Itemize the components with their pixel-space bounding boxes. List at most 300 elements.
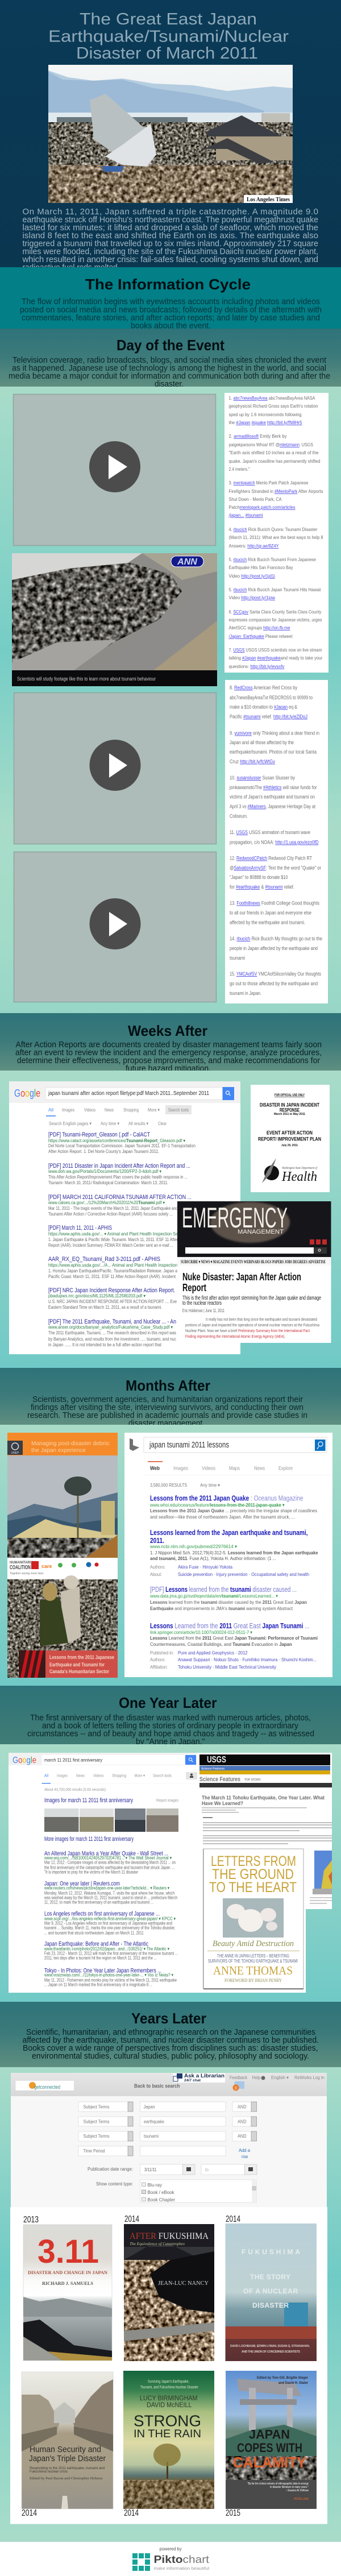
Bing results: www.data.jma.go.jp/svd/eqev/data/en/tsunami/LessonsLearned... ▾ [149, 1593, 278, 1599]
tabs: All [48, 1107, 53, 1113]
Los Angeles Times credit: Los Angeles Times [247, 197, 290, 203]
search rows: AND [238, 2119, 247, 2124]
text: one year later description [27, 1713, 314, 1747]
book: Human Security and Japan's Triple Disaster: Fukushima nuclear crisis [30, 2470, 68, 2474]
Health logo [262, 1158, 318, 1184]
Health logo: Health [281, 1169, 317, 1184]
footer: powered by Piktochart: powered by [159, 2546, 182, 2552]
logos strip: care [41, 1563, 52, 1569]
search results: www.theatlantic.com/photo/2012/02/japan...and.../100251/ ▾ The Atlantic ▾ [44, 1947, 169, 1951]
text: months after description [27, 1395, 307, 1428]
book: Strong in the Rain: DAVID McNEILL [147, 2402, 192, 2409]
search results: Eastern Standard Time on March 11, 2011, as a result of a tsunami. [48, 1305, 162, 1310]
date range and content type: Publication date range: [88, 2167, 133, 2172]
text: day of the event description: Television coverage, radio broadcasts, blogs, and social media sites chronicled the event [13, 355, 327, 365]
document cover: Washington State Department of Health: REPORT/ IMPROVEMENT PLAN [258, 1136, 321, 1143]
document cover: Washington State Department of Health: DISASTER IN JAPAN INCIDENT [260, 1102, 319, 1109]
text: weeks after description: determine their effectiveness, propose improvements, and make recommendations for [17, 1056, 320, 1065]
footer: powered by Piktochart [0, 2542, 341, 2576]
book year labels: 2013 [23, 2215, 39, 2225]
search results: Japan: One year later | Reuters.com [44, 1881, 120, 1888]
tabs: News [254, 1466, 265, 1471]
tabs: Shopping [123, 1107, 139, 1113]
book: After Fukushima: JEAN-LUC NANCY [158, 2280, 209, 2287]
Bing results: Countermeasures, Coastal Buildings, and Tsunami Evacuation in Japan [150, 1641, 292, 1647]
panel: tweets 1-7: /Japan_Earthquake Please retweet [228, 633, 293, 639]
Bing results: About: [150, 1571, 162, 1577]
Ask a Librarian chat badge: 24/7 chat [184, 2079, 201, 2083]
panel: tweets 1-7: 4. rbucich Rick Bucich Quora: Tsunami Disaster [228, 526, 318, 532]
panel: tweets 1-7: (March 11, 2011): What are the best ways to help 8 [228, 534, 323, 540]
Bing results: Lessons learned from the tsunami disaster caused by the 2011 Great East Japan [150, 1599, 307, 1605]
band: Day of the Event [0, 329, 341, 389]
heading: Months After: Months After [126, 1377, 210, 1394]
search results: Mar 11, 2011 - The tragic events of the March 11, 2011 Japan Earthquake and [48, 1206, 178, 1211]
search results: pbadupws.nrc.gov/docs/ML1125/ML112580203.pdf ▾ [48, 1293, 145, 1299]
intro paragraph: earthquake struck off Honshu's northeastern coast. The powerful megathrust quake [23, 215, 318, 225]
video placeholder 2 [14, 692, 216, 844]
panel: tweets 1-7: Video http://post.ly/1jd1i [228, 573, 275, 579]
title: The Great East Japan [80, 10, 257, 28]
book year labels [22, 2214, 240, 2518]
search rows: earthquake [144, 2119, 164, 2124]
book: Fukushima, The Story of a Nuclear Disaster: FUKUSHIMA [242, 2248, 300, 2256]
title [48, 10, 289, 63]
book: Fukushima, The Story of a Nuclear Disaster [225, 2224, 317, 2361]
Ask a Librarian chat badge: Ask a Librarian [184, 2073, 224, 2079]
text: day of the event description: as it happened. Japanese use of technology is among the highest in the world, and social [12, 363, 326, 373]
screenshot: Emergency Management article [177, 1201, 331, 1343]
search results: [PDF] The 2011 Earthquake, Tsunami, and Nuclear ... - An [48, 1318, 176, 1325]
screenshot: Google search for first anniversary [9, 1753, 198, 1993]
tabs: Videos [202, 1466, 215, 1471]
tabs: 3,580,000 RESULTS [150, 1483, 187, 1488]
panel: tweets 1-7: Patchmenlopark.patch.com/articles [228, 504, 296, 510]
top links [230, 2075, 325, 2080]
search rows: row [242, 2154, 248, 2159]
band: One Year Later [0, 1686, 341, 1747]
book: After Fukushima: The Equivalence of Catastrophes [130, 2241, 185, 2246]
article subhead and body: Finding representing the International Atomic Energy Agency (IAEA). [185, 1334, 285, 1339]
book: Fukushima, The Story of a Nuclear Disaster: AND THE UNION OF CONCERNED SCIENTISTS [242, 2350, 301, 2354]
cover photo: survivors [7, 1575, 118, 1678]
red title box: Earthquake and Tsunami for [49, 1662, 105, 1668]
Ask a Librarian chat badge [173, 2073, 225, 2083]
panel: tweets 1-7: 2.4 meters." [228, 466, 250, 472]
search results: AAR_RX_EQ_Tsunami_Rad 3-2011.pdf - APHIS [48, 1256, 160, 1263]
panel: tweets 1-7: 5. rbucich Rick Bucich Japan Tsunami Hits Hawaii [228, 587, 321, 592]
search results: [PDF] MARCH 2011 CALIFORNIA TSUNAMI AFTER ACTION ... [48, 1194, 192, 1201]
tabs [42, 1772, 197, 1792]
screenshot: USGS science features article: Science Features [201, 1767, 224, 1770]
book: Strong in the Rain: IN THE RAIN [134, 2428, 201, 2440]
article headline: Report [182, 1282, 206, 1293]
Bing results: www.ncbi.nlm.nih.gov/pubmed/22976614 ▾ [149, 1544, 238, 1549]
panel: tweets 1-7: 5. rbucich Rick Bucich Tsunami From Japanese [228, 557, 316, 562]
Bing results [149, 1494, 318, 1670]
caption: Scientists will study footage like this to learn more about tsunami behaviour [17, 676, 156, 682]
tabs: More ▾ [134, 1773, 145, 1778]
book: Letters from the Ground to the Heart: LETTERS FROM [211, 1853, 296, 1869]
text: one year later description: and a book of letters telling the stories of ordinary people in extraordinary [42, 1721, 298, 1731]
top links: Help [252, 2075, 260, 2080]
panel: tweets 8-15: Coliseum. [230, 813, 248, 819]
intro paragraph [22, 207, 318, 272]
report cover: Managing post-disaster debris [7, 1433, 118, 1678]
book: Fukushima, The Story of a Nuclear Disaster: DAVID LOCHBAUM, EDWIN LYMAN, SUSAN Q. STRANAHAN, [230, 2345, 310, 2348]
book year labels: 2015 [226, 2508, 240, 2518]
tabs [46, 1105, 192, 1126]
book: Japan Copes with Calamity: "By far the richest volume of ethnographic data to emerge [247, 2482, 309, 2486]
book: Japan Copes with Calamity: Edited by Tom Gill, Brigitte Steger [257, 2376, 308, 2380]
book: Human Security and Japan's Triple Disaster [22, 2372, 113, 2509]
video placeholder 1 [14, 395, 216, 546]
search results: [PDF] NRC Japan Incident Response After Action Report. [48, 1287, 175, 1294]
text: one year later description: by "Anne in Japan." [136, 1737, 205, 1747]
book: Strong in the Rain: Tsunami, and Fukushima Nuclear Disaster [140, 2386, 199, 2390]
tabs: News [105, 1107, 114, 1113]
intro paragraph: which resulted in another crisis: fail-safes failed, cooling systems shut down, and [22, 255, 318, 264]
search rows: Subject Terms [83, 2134, 109, 2139]
section: years later content [0, 2067, 341, 2542]
panel: tweets 1-7: questions: http://bit.ly/evsxfv [228, 663, 285, 669]
search results: 11, 2012, to mark the first anniversary of an earthquake and tsunami ... [44, 1900, 153, 1905]
panel: tweets 8-15: 11. USGS USGS animation of tsunami wave [230, 829, 310, 835]
search results: ... Japan on 11 March marked the first anniversary of a magnitude-9 ... [44, 1982, 152, 1988]
Bing results: Published in: [150, 1650, 174, 1656]
panel: tweets 1-7: the #Japan #quake http://bit.ly/fN8Hr5 [228, 420, 302, 425]
book: Strong in the Rain [123, 2371, 214, 2509]
search results: 1. Japan Earthquake & Pacific Wide. Tsunami. March 11, 2011. ESF 11 After [48, 1237, 178, 1242]
tabs: Search tools [153, 1773, 172, 1778]
panel: tweets 8-15: @SalvationArmySF: Text the the word "Quake" or [230, 865, 321, 871]
search rows: Japan [143, 2105, 155, 2109]
image thumbnails [44, 1808, 178, 1832]
date range and content type: Book / eBook [148, 2190, 174, 2195]
panel: tweets 8-15: Japan and all those affected by the [230, 740, 294, 745]
date range and content type: Show content type: [96, 2181, 133, 2187]
search results: [PDF] March 11, 2011 - APHIS [48, 1225, 112, 1231]
search results: 2011, two days after a tsunami hit the region on March 11, 2011 and the ... [44, 1956, 157, 1960]
panel: tweets 8-15: propagation, c/o NOAA: http://1.usa.gov/ezo0fD [230, 839, 319, 845]
panel: tweets 1-7: paigekparsons Whoa! RT @mletzmann: USGS [228, 442, 313, 447]
red title box: Lessons from the 2011 Japanese [49, 1654, 114, 1661]
Bing results: and tsunami, 2011. Fuse A(1), Yokota H. Author information: (1 ... [150, 1555, 276, 1561]
top links: ReWorks Log In [294, 2075, 325, 2080]
search results: Tokyo - In Photos: One Year Later Japan Remembers ... [44, 1967, 161, 1974]
Bing results: Authors: [150, 1657, 165, 1662]
book: Letters from the Ground to the Heart: TO THE HEART [209, 1880, 297, 1895]
panel: tweets 8-15: affected by the earthquake and tsunami. [230, 920, 305, 926]
UNEP logo: UNEP [11, 1451, 19, 1455]
text: weeks after description: future hazard mitigation. [126, 1064, 211, 1073]
Piktochart wordmark: Pikto chart [153, 2554, 209, 2565]
search results: the first anniversary of the catastrophic earthquake and tsunami that struck Japan. ... [44, 1865, 175, 1870]
tabs: Videos [84, 1107, 95, 1113]
Bing results: Akira Fuse · Hiroyuki Yokota [178, 1564, 232, 1570]
panel: tweets 1-7: Answers: http://qr.ae/9Z4Y [228, 543, 279, 549]
text: weeks after description [15, 1040, 322, 1073]
band: Years Later [0, 2002, 341, 2067]
top banner background [0, 0, 341, 267]
panel: tweets 1-7: talking #Japan #earthquakeand ready to take your [228, 655, 323, 661]
search results: Monday, March 12, 2012. Wakana Kumagai, 7, visits the spot where her house, which [44, 1891, 174, 1895]
book year labels: 2014 [124, 2508, 139, 2518]
top links: English ▾ [271, 2075, 289, 2080]
search results: Report (AAR). Incident Summary. FEMA RX Watch Center sent an e-mail ... [48, 1243, 173, 1248]
Bing results: [PDF] Lessons learned from the tsunami disaster caused ... [150, 1586, 297, 1594]
search results: Mar 12, 2012 - Compare images of areas affected by the devastating March 2011 ... on [44, 1860, 176, 1865]
tabs: Images [173, 1466, 188, 1471]
search results: www.doh.wa.gov/Portals/1/Documents/1200/FP2-3-4doh.pdf ▾ [48, 1169, 161, 1174]
panel: tweets 1-7: 7. USGS USGS USGS scientists now on live stream [228, 647, 322, 653]
document cover: Washington State Department of Health: RESPONSE [280, 1107, 300, 1113]
book: Letters from the Ground to the Heart: THE GROUND [212, 1866, 294, 1882]
Health logo: Washington State Department of [282, 1166, 318, 1170]
Bing logo [130, 1438, 139, 1451]
text: information cycle description [20, 297, 322, 331]
document cover: Washington State Department of Health: March 2011 to May 2011 [274, 1113, 305, 1116]
date range and content type: 3/11/11 [144, 2167, 157, 2172]
text: weeks after description: after an event to review the incident and the emergency response, analyze procedures, [15, 1048, 322, 1057]
heading: One Year Later: One Year Later [119, 1694, 217, 1711]
report cover: Managing post-disaster debris: Managing post-disaster debris: [31, 1440, 110, 1447]
panel: tweets 8-15: for #earthquake & #tsunami relief. [230, 884, 294, 890]
search rows: Subject Terms [83, 2105, 109, 2109]
tabs: Maps [229, 1466, 240, 1471]
text: years later description: Books cover a wide range of perspectives from disciplines such as: disaster studies, [23, 2043, 318, 2053]
panel: tweets 1-7: 6. SCCgov Santa Clara County Santa Clara County [228, 609, 322, 615]
article text blocks [202, 1807, 332, 1844]
text: weeks after description: After Action Reports are documents created by disaster management teams fairly soon [16, 1040, 322, 1050]
date range and content type: to [205, 2167, 209, 2172]
title: Earthquake/Tsunami/Nuclear [48, 27, 289, 45]
screenshot: library advanced search form [11, 2073, 327, 2207]
tabs: About 43,700,000 results (0.63 seconds) [44, 1787, 106, 1792]
search box: japan tsunami 2011 lessons [149, 1440, 229, 1450]
search results [44, 1850, 178, 1988]
section: day of the event content [0, 387, 341, 1013]
folder icon with count [233, 2081, 244, 2091]
tabs: News [76, 1773, 85, 1778]
document cover: Washington State Department of Health: July 29, 2011 [281, 1144, 298, 1147]
panel: tweets 8-15: tsunami [230, 955, 245, 961]
text: one year later description: circumstances -- and of beauty and hope amid chaos and tragedy -- as witnessed [27, 1729, 314, 1739]
cherry blossom photo [223, 1898, 284, 1938]
tabs: Web [150, 1466, 160, 1471]
Bing results: Suicide prevention · Injury prevention · Occupational safety and health [178, 1571, 309, 1577]
date range and content type [88, 2164, 257, 2202]
Bing results: 2011. [150, 1537, 164, 1545]
screenshot: Google search for after action reports [9, 1081, 240, 1354]
book: Japan Copes with Calamity: – Susanna M. Hoffman [286, 2489, 309, 2492]
search results: Del Norte Local Transportation Commission. Japan Tsunami 2011. EF-1 Transportation [48, 1143, 196, 1148]
date range and content type: Book Chapter [148, 2197, 175, 2202]
search box: japan tsunami after action report filetype:pdf March 2011..September 2011 [48, 1090, 209, 1097]
book: Human Security and Japan's Triple Disaster: Responding to the 2011 earthquake, tsunami and [30, 2467, 105, 2470]
search results: Feb 23, 2012 - March 11, 2012 will mark the first anniversary of the massive tsunami ... [44, 1951, 178, 1956]
Bing results: Anawat Suppasri · Nobuo Shuto · Fumihiko Imamura · Shunichi Koshim... [178, 1657, 317, 1662]
getconnected logo [16, 2081, 74, 2090]
article headline [182, 1271, 301, 1293]
footer: powered by Piktochart: make information beautiful [153, 2566, 209, 2571]
book: Letters from the Ground to the Heart: Beauty Amid Destruction [213, 1939, 294, 1948]
panel: tweets 8-15: 15. YMCAofSV YMCAofSiliconValley Our thoughts [230, 971, 321, 977]
Bing results: Earthquake and improvements in JMA's tsunami warning system Abstract [150, 1606, 293, 1611]
text: months after description: disaster management. [128, 1418, 205, 1428]
search results: This After Action Report/Improvement Plan covers the public health response in ... [48, 1175, 188, 1180]
search rows [78, 2102, 257, 2159]
screenshot: Google search for first anniversary: Report images [156, 1798, 178, 1803]
panel: tweets 8-15: 12. RedwoodCPatch Redwood City Patch RT [230, 855, 312, 861]
panel: tweets 1-7: Shut Down - Menlo Park, CA [228, 496, 282, 502]
text: months after description: research. These are published in academic journals and provide case studies in [27, 1411, 307, 1420]
panel: tweets 1-7: quake. Japan's coastline has permanently shifted [228, 458, 321, 464]
red title box [19, 1650, 118, 1678]
Emergency logo [182, 1202, 288, 1235]
Bing results: Lessons Learned from the 2011 Great East Japan Tsunami ... [150, 1622, 310, 1630]
Emergency logo: MANAGEMENT [238, 1229, 284, 1235]
article title [202, 1795, 325, 1807]
search results: "It is important to pray for the victims of the March 11 disaster [44, 1869, 138, 1875]
panel: tweets 8-15: jonkawamotoThe #Athletics will raise funds for [229, 785, 317, 790]
text: information cycle description: books about the event. [131, 321, 211, 331]
logos strip [10, 1561, 99, 1575]
intro paragraph: radioactive fuel rods melted. [23, 263, 119, 272]
book year labels: 2014 [226, 2214, 240, 2224]
band: Months After [0, 1368, 341, 1428]
book: Japan Copes with Calamity: CALAMITY [233, 2454, 306, 2471]
tree [153, 2444, 181, 2479]
search results: https://www.aphis.usda.gov/... ▾ Animal and Plant Health Inspection Se [48, 1231, 178, 1237]
search results: [PDF] 2011 Disaster in Japan Incident After Action Report and ... [48, 1163, 190, 1169]
search results: https://www.calact.org/assets/conferences/Tsunami-Report_Gleason.pdf ▾ [48, 1138, 185, 1143]
heading: Science Features: Science Features [199, 1776, 240, 1783]
screenshot: library advanced search form: Back to basic search [134, 2083, 180, 2089]
Bing results: Pure and Applied Geophysics · 2012 [178, 1650, 248, 1656]
search rows: tsunami [144, 2134, 159, 2139]
panel: tweets 1-7: geophysicist Richard Gross says Earth's rotation [228, 403, 318, 409]
search results [48, 1131, 196, 1347]
panel: tweets 1-7: 3. menlopatch Menlo Park Patch Japanese [228, 480, 309, 486]
heading: Years Later: Years Later [131, 2010, 206, 2027]
search results: by Banyan Analytics, and results from the investment ..... tsunami, and nuc [48, 1337, 176, 1342]
search results: www.wsj.com/.../SB10001424052970204781... ▾ The Wall Street Journal ▾ [44, 1856, 172, 1860]
Bing results: www.whoi.edu/oceanus/feature/lessons-from-the-2011-japan-quake ▾ [149, 1502, 285, 1508]
Bing results: Authors: [150, 1564, 165, 1570]
search results: in Japan ...... It is not intended to be a full after-action report that [48, 1342, 162, 1347]
tabs: Clear [158, 1121, 167, 1126]
search results: www.scpr.org/.../los-angeles-reflects-first-anniversary-great-japan/ ▾ KPCC ▾ [44, 1916, 176, 1922]
article subhead and body: to the nuclear reactors [182, 1300, 222, 1306]
section: one year later content [0, 1744, 341, 2002]
search results: www.anser.org/docs/banyan_analytics/Fukushima_Case_Study.pdf ▾ [48, 1325, 173, 1330]
article subhead and body: Eric Holdeman | June 11, 2011 [182, 1308, 224, 1313]
intro paragraph: miles were flooded, including the site of the Fukushima Daiichi nuclear power plant, [23, 247, 318, 256]
search results: 1. Honshu Japan Earthquake/Pacific. Tsunami/Radiation Release. Japan a [48, 1268, 178, 1274]
book: Strong in the Rain: Surviving Japan's Earthquake, [148, 2380, 189, 2384]
Bing results: Lessons from the 2011 Japan Quake ... precisely into the irregular shape of coastlines [150, 1508, 317, 1513]
screenshot: Bing search results [124, 1433, 332, 1677]
text: years later description [23, 2027, 319, 2061]
book: Fukushima, The Story of a Nuclear Disaster: THE STORY [250, 2273, 290, 2281]
panel: tweets 1-7: expresses compassion for Japanese victims, urges [228, 617, 322, 623]
text: information cycle description: The flow of information begins with eyewitness accounts including photos and videos [22, 297, 320, 306]
section: months after content [0, 1425, 341, 1686]
text: months after description: Scientists, government agencies, and humanitarian organizations report their [32, 1395, 303, 1404]
panel: tweets 8-15: tsunami in Japan. [230, 990, 261, 996]
tabs: Any time ▾ [200, 1483, 220, 1488]
panel: tweets 8-15: Pacific #tsunami relief. http://bit.ly/eZlDoJ [230, 714, 307, 720]
tabs: Explore [278, 1466, 293, 1471]
Google logo: Google [13, 1756, 36, 1765]
shake map [310, 1851, 332, 1903]
Google logo: Google [14, 1088, 40, 1099]
text: years later description: affected by the earthquake, tsunami, and nuclear disaster continues to be published. [23, 2035, 319, 2045]
band: Weeks After [0, 1013, 341, 1073]
top links: Feedback [230, 2075, 248, 2080]
search rows: AND [238, 2134, 247, 2139]
search results: was washed away by the March 11, 2011 tsunami, used to stand in ... prefecture March [44, 1895, 177, 1900]
book: After Fukushima [124, 2224, 214, 2361]
book: Letters from the Ground to the Heart: SURVIVORS OF THE TOHOKU EARTHQUAKE & TSUNAMI [208, 1959, 298, 1964]
search results: www.reuters.com/news/picture/japan-one-year-later?articleId... ▾ Reuters ▾ [44, 1885, 169, 1891]
search results: tsunami ... Sunday, March 11, marks the one-year anniversary of the Tohoku disaster, [44, 1925, 175, 1931]
search results: [PDF] Tsunami-Report_Gleason (.pdf - CalACT [48, 1131, 150, 1138]
panel: tweets 8-15: Cruz http://bit.ly/fcWtGv [230, 758, 275, 764]
article title: Have We Learned? [202, 1801, 243, 1807]
text: years later description: Scientific, humanitarian, and ethnographic research on the Japanese communities [26, 2027, 315, 2037]
book: 3.11 Disaster and Change in Japan: DISASTER AND CHANGE IN JAPAN [28, 2270, 108, 2275]
panel: tweets 8-15: April 3 vs #Mariners, Japanese Heritage Day at [230, 804, 315, 810]
screenshot: Google search for first anniversary: More images for march 11 2011 first anniversary [44, 1836, 134, 1843]
search results: Tsunami- March 10, 2011/ Radiological Contamination- March 13, 2011. [48, 1180, 168, 1185]
panel: tweets 1-7: 2. armadillosoft Emily Berk by [228, 433, 287, 439]
tabs: Shopping [112, 1773, 126, 1778]
Bing results: Lessons from the 2011 Japan Quake : Oceanus Magazine [150, 1494, 303, 1502]
search results: www.vosizneias.com/.../11/tokyo-in-photos-one-year-later-... ▾ Vos Iz Neias? ▾ [44, 1973, 173, 1977]
heading: Weeks After: Weeks After [128, 1022, 207, 1039]
tabs: All results ▾ [128, 1121, 149, 1126]
book: Strong in the Rain: STRONG [134, 2412, 201, 2430]
logos strip: COALITION [10, 1565, 31, 1571]
search box: march 11 2011 first anniversary [44, 1757, 103, 1762]
social icons [310, 1239, 327, 1245]
tabs: Videos [93, 1773, 104, 1778]
cover photo: lone pine [7, 1455, 118, 1558]
panel: tweets 1-7: Firefighters Stranded in #MenloPark After Airports [228, 488, 323, 494]
document cover: Washington State Department of Health: EVENT AFTER ACTION [267, 1130, 313, 1136]
Bing results: 1. J Nippon Med Sch. 2012;79(4):312-5. Lessons learned from the Japan earthquake [150, 1550, 318, 1555]
red title box: Canada's Humanitarian Sector [49, 1669, 109, 1675]
panel: tweets 8-15: victims of Japan's earthquake and tsunami on [230, 794, 315, 799]
Piktochart logo mark [132, 2553, 150, 2571]
search results: Pacific Coast. March 11, 2011. ESF 11 After Action Report (AAR). Incident [48, 1274, 176, 1279]
panel: tweets 1-7: Video http://post.ly/1jow [228, 595, 276, 600]
panel: tweets 8-15: to all our friends in Japan and everyone else [230, 910, 311, 915]
section: weeks after content [0, 1071, 341, 1368]
book: 3.11 Disaster and Change in Japan: 3.11 [38, 2233, 99, 2270]
intro paragraph: island 8 feet to the east and shifted the Earth on its axis. The earthquake also [23, 231, 318, 240]
search rows: Time Period [83, 2148, 105, 2154]
panel: tweets 8-15: earthquake/tsunami. Photos of our local Santa [230, 749, 317, 755]
text: information cycle description: posted on social media and news broadcasts; followed by details of the aftermath with [20, 305, 322, 315]
band: The Information Cycle [0, 267, 341, 331]
panel: tweets 1-7 [224, 393, 328, 673]
document cover: Washington State Department of Health [251, 1085, 330, 1192]
book: 3.11 Disaster and Change in Japan [23, 2225, 112, 2361]
tabs: All [44, 1773, 48, 1778]
